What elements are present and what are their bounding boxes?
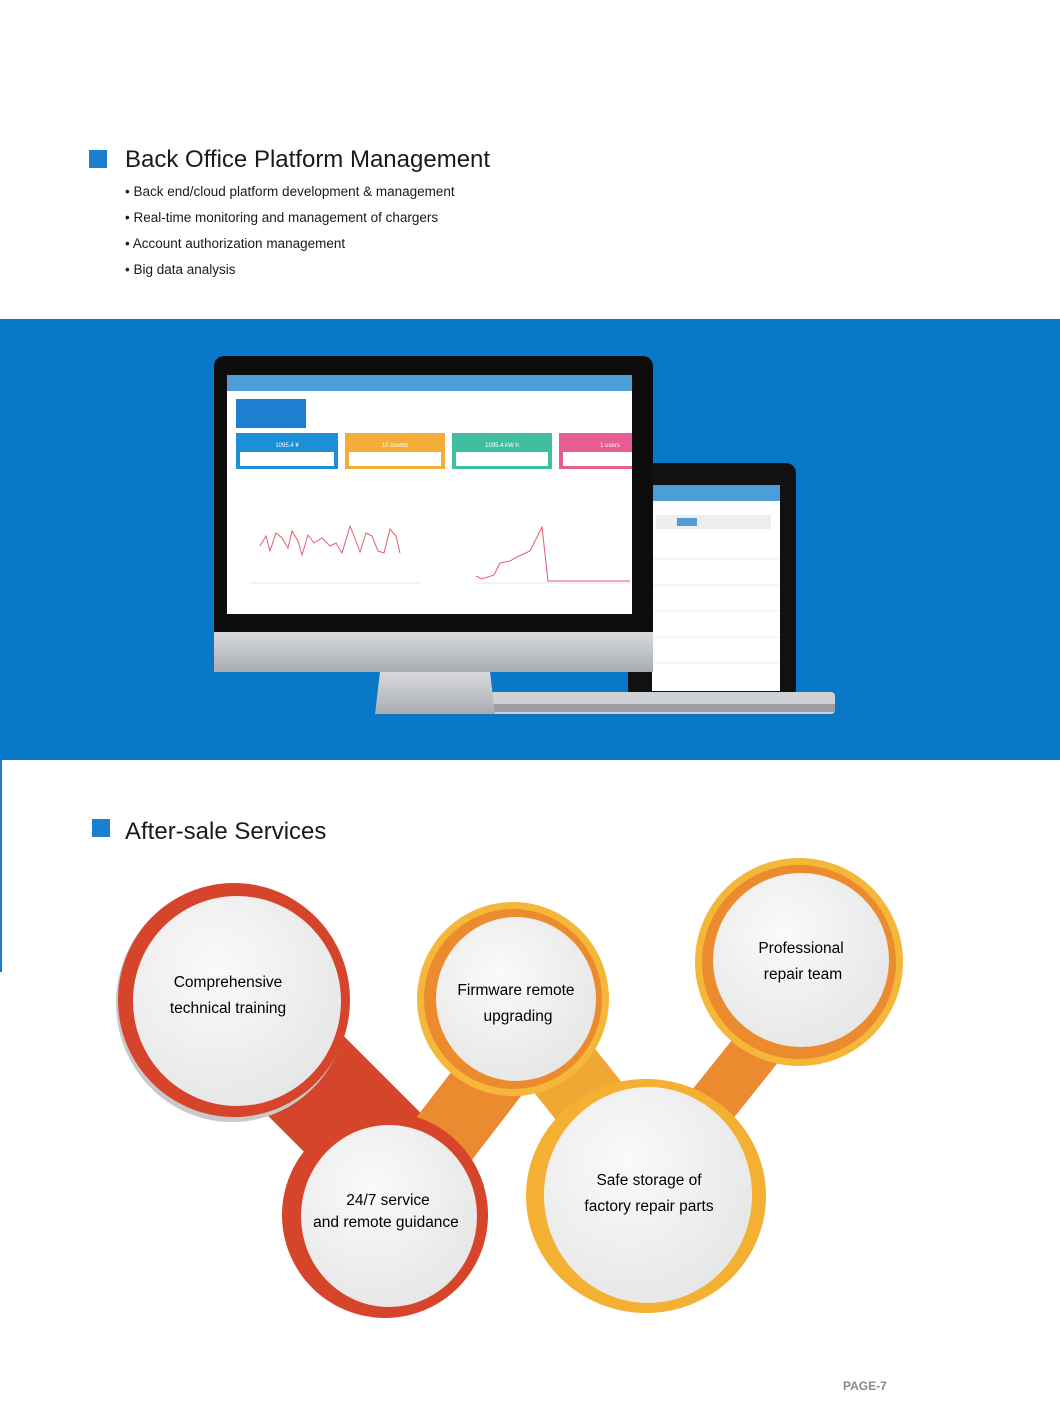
left edge line xyxy=(0,760,2,972)
bubble: firmware: Firmware remote xyxy=(457,982,575,999)
bubble: 24/7 xyxy=(282,1112,488,1318)
monitor xyxy=(214,356,653,714)
bullet list xyxy=(125,184,455,277)
bubble: 24/7: and remote guidance xyxy=(313,1214,459,1231)
bubble: firmware: upgrading xyxy=(484,1008,552,1025)
bullet list: • Real-time monitoring and management of chargers xyxy=(125,210,438,225)
bullet list: • Big data analysis xyxy=(125,262,236,277)
bubble: firmware xyxy=(417,902,609,1096)
page number: PAGE-7 xyxy=(843,1379,887,1393)
laptop xyxy=(485,463,835,714)
bubble: comprehensive training xyxy=(116,883,350,1122)
bubble: 24/7: 24/7 service xyxy=(346,1192,430,1209)
monitor: 1095.4 kW h xyxy=(485,443,519,449)
bubble: professional xyxy=(695,858,903,1066)
bubble: comprehensive training: technical training xyxy=(170,1000,286,1017)
heading: back office: Back Office Platform Management xyxy=(125,146,490,173)
bubble: professional: Professional xyxy=(758,940,844,957)
blue band with devices xyxy=(0,319,1060,760)
bullet list: • Account authorization management xyxy=(125,236,345,251)
bubble: safe storage: Safe storage of xyxy=(596,1172,702,1189)
heading: after-sale: After-sale Services xyxy=(125,818,326,845)
bubble: safe storage xyxy=(526,1079,766,1313)
bubble: comprehensive training: Comprehensive xyxy=(174,974,282,991)
bubble: safe storage: factory repair parts xyxy=(584,1198,714,1215)
monitor: 1 users xyxy=(600,443,620,449)
monitor: 1095.4 ¥ xyxy=(275,443,299,449)
connectors xyxy=(290,1020,780,1170)
monitor: 10 counts xyxy=(382,443,408,449)
bubble: professional: repair team xyxy=(764,966,842,983)
bullet list: • Back end/cloud platform development & management xyxy=(125,184,455,199)
